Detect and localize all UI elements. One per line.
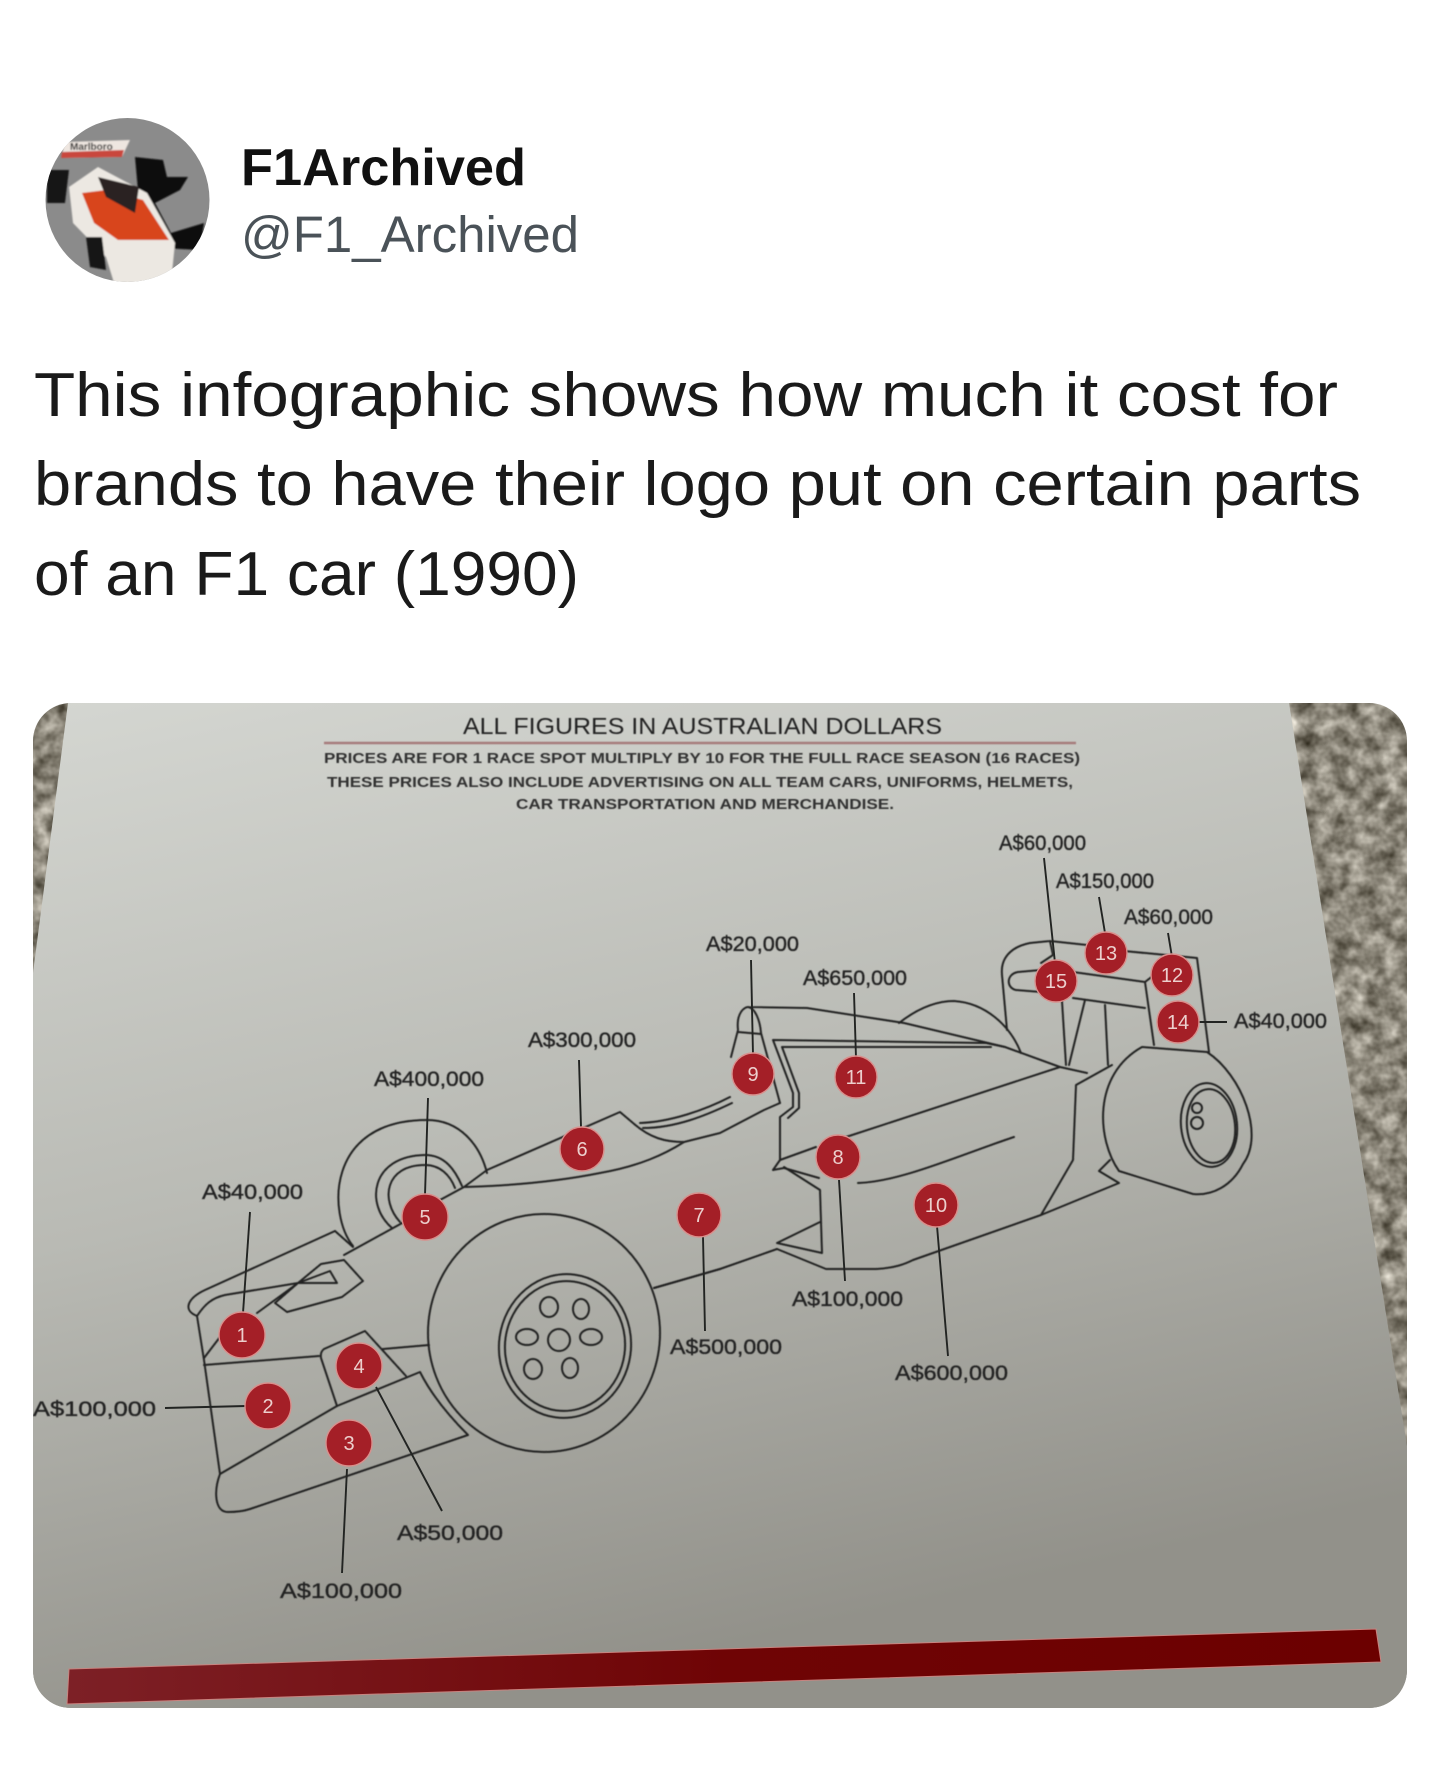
price labels: A$100,000 [792,1288,903,1311]
numbered red markers: 5 [419,1207,431,1229]
price labels: A$40,000 [202,1181,303,1204]
engine cover [899,1001,1021,1053]
numbered red markers: 9 [747,1064,759,1086]
side pod [773,1040,1005,1160]
leader lines from markers to prices [165,858,1227,1573]
price labels: A$40,000 [1234,1010,1327,1033]
sheet heading: PRICES ARE FOR 1 RACE SPOT MULTIPLY BY 10 FOR THE FULL RACE SEASON (16 RACES) [324,751,1080,767]
photo of the price sheet [33,703,1407,1708]
numbered red markers: 14 [1167,1012,1189,1034]
numbered red markers: 7 [693,1205,705,1227]
price labels: A$100,000 [33,1398,156,1421]
price labels: A$500,000 [670,1336,782,1359]
price labels: A$60,000 [999,832,1086,855]
numbered red markers: 3 [343,1433,355,1455]
roll hoop [731,1007,1087,1103]
numbered red markers [219,932,1199,1466]
numbered red markers: 1 [236,1325,248,1347]
numbered red markers: 6 [576,1139,588,1161]
price labels: A$600,000 [895,1362,1008,1385]
F1 car line drawing [188,941,1252,1512]
front wing and nose [188,1231,468,1512]
price labels: A$20,000 [706,933,799,956]
numbered red markers: 13 [1095,943,1117,965]
red footer band [67,1629,1381,1704]
numbered red markers: 8 [832,1147,844,1169]
price labels: A$150,000 [1056,870,1154,893]
price labels: A$100,000 [280,1580,402,1603]
sheet heading: THESE PRICES ALSO INCLUDE ADVERTISING ON ALL TEAM CARS, UNIFORMS, HELMETS, [327,775,1073,791]
avatar: F1 car profile picture [45,118,211,283]
post text: of an F1 car (1990) [34,540,579,609]
rear tyre [1103,1047,1252,1194]
price labels: A$400,000 [374,1068,484,1091]
account name: F1Archived [241,139,526,197]
numbered red markers: 12 [1161,965,1183,987]
paper sheet [33,703,1407,1708]
numbered red markers: 4 [353,1356,365,1378]
price labels: A$300,000 [528,1029,636,1052]
post text [34,361,1361,609]
front upper tyre and hub [338,1120,487,1246]
avatar: F1 car profile picture: Marlboro [70,142,113,153]
price labels: A$60,000 [1124,906,1213,929]
carpet background [33,703,1407,1708]
numbered red markers: 11 [846,1067,866,1089]
price labels: A$650,000 [803,967,907,990]
nose to cockpit [440,1112,684,1200]
sheet heading [324,713,1080,813]
account handle: @F1_Archived [241,206,579,263]
post text: brands to have their logo put on certain parts [34,450,1361,519]
rear wing [1002,941,1209,1052]
numbered red markers: 10 [925,1195,947,1217]
numbered red markers: 15 [1045,971,1067,993]
front tyre and wheel [428,1214,660,1452]
price labels: A$50,000 [397,1522,503,1545]
sheet heading: ALL FIGURES IN AUSTRALIAN DOLLARS [463,713,942,739]
price labels [33,832,1327,1603]
sheet heading: CAR TRANSPORTATION AND MERCHANDISE. [516,797,894,813]
numbered red markers: 2 [262,1396,274,1418]
post text: This infographic shows how much it cost for [34,361,1338,430]
